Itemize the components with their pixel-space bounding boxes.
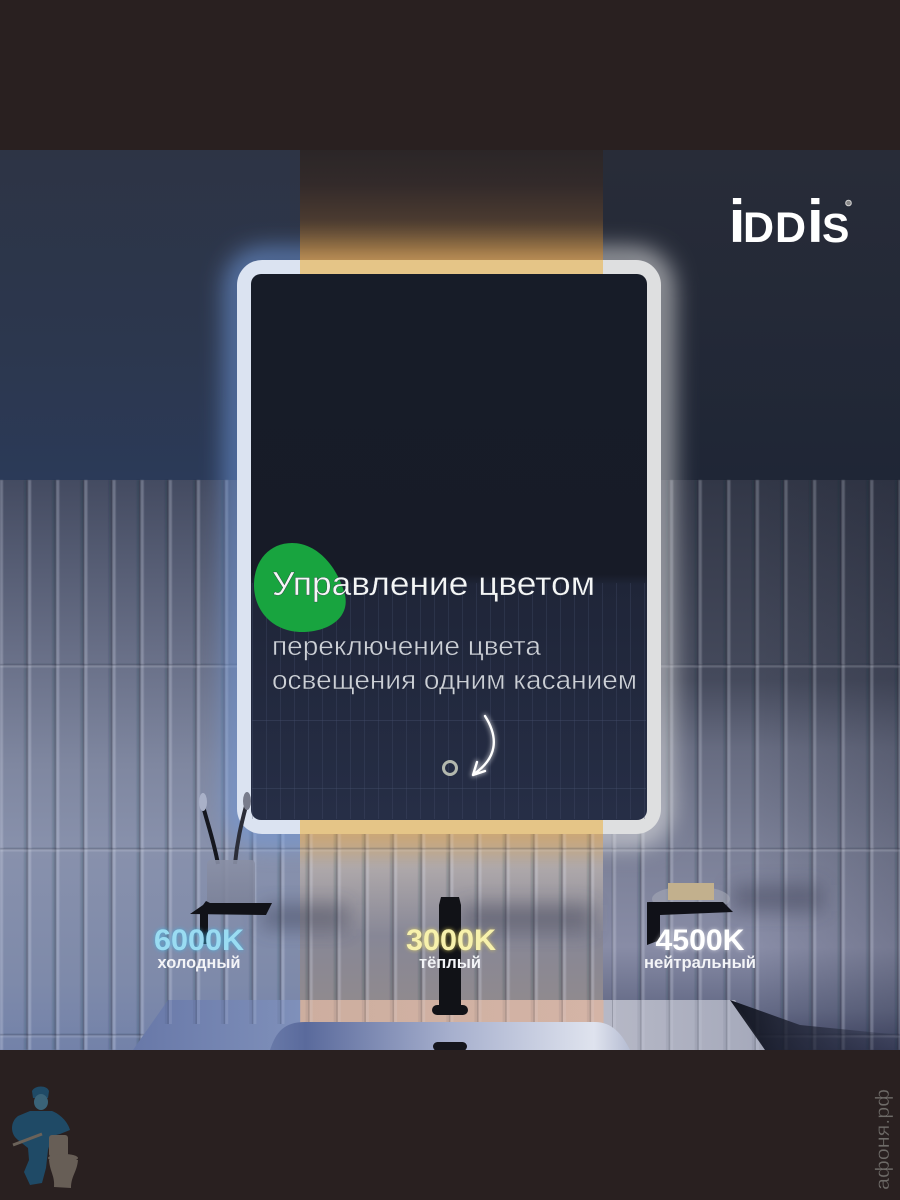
label: 4500K <box>644 924 756 972</box>
green blob <box>254 543 346 632</box>
label: 3000K: тёплый <box>419 953 481 972</box>
logo: iddis: D <box>743 204 774 252</box>
faucet <box>432 897 468 1015</box>
mirror glow: cold <box>210 232 300 858</box>
plumber <box>12 1086 70 1185</box>
label: 6000K: 6000K <box>154 924 244 957</box>
description text <box>272 631 637 695</box>
counter <box>134 1000 765 1050</box>
toilet <box>48 1135 78 1188</box>
mirror <box>237 260 661 834</box>
label: 3000K: 3000K <box>406 924 496 957</box>
tiled wall <box>0 480 900 1050</box>
sink <box>270 1022 630 1050</box>
label: 4500K: 4500K <box>656 924 745 957</box>
right cabinet shadow <box>730 1000 900 1050</box>
registered mark <box>846 200 851 206</box>
label: 6000K: 6000K <box>154 924 244 957</box>
mirror glow: warm <box>300 237 603 856</box>
label: 6000K <box>154 924 244 972</box>
logo: iddis: D <box>775 204 806 252</box>
logo: iddis: i <box>807 188 824 255</box>
upper wall <box>0 150 900 480</box>
touch sensor icon <box>444 762 456 774</box>
bathroom photo scene <box>0 150 900 1051</box>
description text: переключение цвета <box>272 631 542 661</box>
mirror glow: neutral <box>603 231 690 860</box>
soap dish <box>647 883 733 945</box>
arrow <box>473 716 494 775</box>
mirror glass <box>251 274 647 820</box>
drain <box>433 1042 467 1050</box>
icon: plumber with toilet <box>12 1086 78 1188</box>
label: 4500K: 4500K <box>656 924 745 957</box>
label: 4500K: нейтральный <box>644 953 756 972</box>
heading: Управление цветом <box>272 565 595 602</box>
toothbrush cup <box>190 792 272 944</box>
logo: iddis: S <box>822 205 849 251</box>
label: 6000K: холодный <box>158 953 240 972</box>
logo: iddis: i <box>729 188 745 255</box>
wrench <box>13 1134 42 1145</box>
shelf shadows <box>262 885 822 931</box>
mirror frame <box>237 260 661 834</box>
description text: освещения одним касанием <box>272 665 637 695</box>
watermark: афоня.рф <box>873 1089 894 1190</box>
label: 3000K <box>406 924 496 972</box>
label: 3000K: 3000K <box>406 924 496 957</box>
